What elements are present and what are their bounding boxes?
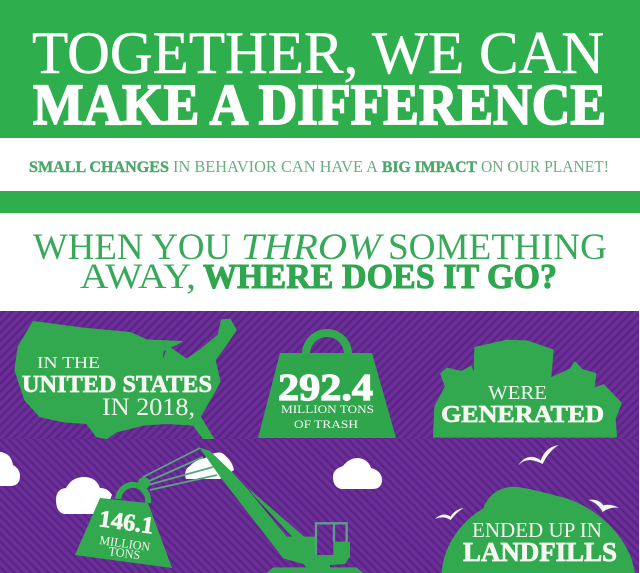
weight text xyxy=(278,367,374,431)
weight text: MILLION xyxy=(99,533,151,554)
icon: united states map xyxy=(15,319,236,438)
map text: UNITED STATES xyxy=(22,372,212,398)
icon: landfill mound xyxy=(442,487,635,573)
subtitle xyxy=(29,157,609,176)
icon: trash bags xyxy=(435,341,620,436)
landfill text: LANDFILLS xyxy=(463,537,617,567)
crane boom and body xyxy=(199,447,350,568)
section heading: SOMETHING xyxy=(388,227,607,268)
section heading: AWAY, xyxy=(80,256,196,296)
subtitle: ON OUR PLANET! xyxy=(481,157,609,176)
crane cables xyxy=(143,448,217,490)
icon: birds xyxy=(435,445,619,520)
bags text: WERE xyxy=(488,382,547,404)
weight text: OF TRASH xyxy=(294,417,358,431)
subtitle: IN BEHAVIOR CAN HAVE A xyxy=(173,157,378,176)
subtitle: SMALL CHANGES xyxy=(29,159,169,176)
title banner xyxy=(0,0,640,138)
icon: crane xyxy=(138,447,363,573)
map text xyxy=(22,353,212,421)
bags text: GENERATED xyxy=(441,402,604,428)
weight text: TONS xyxy=(108,544,141,562)
icon: weight 292.4 xyxy=(258,333,396,438)
map text: IN 2018, xyxy=(102,394,195,421)
bags text xyxy=(441,382,604,428)
weight text xyxy=(97,506,155,562)
crane tread xyxy=(267,567,363,573)
landfill text xyxy=(463,518,617,567)
subtitle: BIG IMPACT xyxy=(382,159,477,176)
crane strut xyxy=(248,488,305,537)
section heading: WHEN YOU xyxy=(33,227,231,268)
crane cab frame xyxy=(316,523,347,555)
weight text: 292.4 xyxy=(278,367,373,409)
crane arm and body xyxy=(199,447,363,573)
section heading: WHERE DOES IT GO? xyxy=(203,257,557,296)
map text: IN THE xyxy=(37,353,100,372)
icon: clouds xyxy=(0,452,382,514)
title line 1: TOGETHER, WE CAN xyxy=(32,20,604,86)
landfill text: ENDED UP IN xyxy=(472,518,602,542)
weight text: 146.1 xyxy=(97,506,155,540)
section heading: THROW xyxy=(241,227,384,268)
weight text: MILLION TONS xyxy=(281,402,374,416)
title line 2: MAKE A DIFFERENCE xyxy=(33,72,606,137)
hook block xyxy=(138,477,150,489)
panel: generated xyxy=(0,311,639,439)
panel: landfills xyxy=(0,439,639,573)
icon: weight 146.1 xyxy=(75,485,172,568)
section heading xyxy=(33,227,607,296)
green divider band xyxy=(0,191,640,213)
